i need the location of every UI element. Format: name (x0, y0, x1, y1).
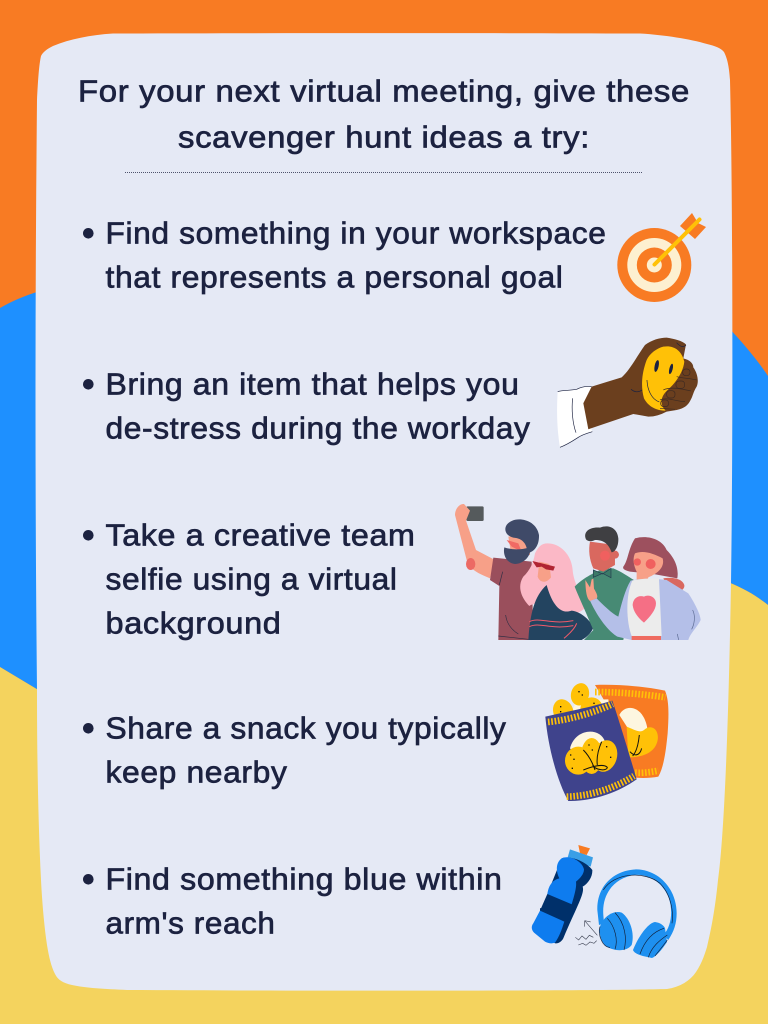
list item: something blue: Find something blue within (106, 862, 502, 896)
list item: de-stress: Bring an item that helps you (106, 366, 520, 402)
list item: team selfie: Take a creative team (106, 518, 416, 552)
list item: team selfie: selfie using a virtual (106, 562, 398, 596)
list item: team selfie (83, 518, 416, 640)
list item: de-stress (83, 366, 530, 446)
list item: personal goal (83, 216, 606, 294)
icon: group taking a selfie (455, 504, 701, 640)
list item: personal goal: Find something in your workspace (106, 216, 606, 250)
list item: de-stress: de-stress during the workday (106, 410, 530, 446)
icon: hand squeezing smiley stress ball (557, 338, 698, 447)
list item: something blue (83, 862, 502, 940)
title: scavenger hunt ideas a try: (178, 120, 590, 154)
list item: personal goal: that represents a personal goal (106, 260, 564, 294)
icon: snack bags (545, 681, 668, 801)
list item: team selfie: background (106, 606, 282, 640)
icon: arrow and squiggles (575, 921, 597, 945)
icon: blue water bottle (532, 845, 593, 943)
list item: snack: keep nearby (106, 754, 288, 790)
title (78, 74, 690, 154)
list item: snack (83, 710, 506, 790)
list item: snack: Share a snack you typically (106, 710, 506, 746)
icon: blue headphones (597, 869, 677, 958)
list item: something blue: arm's reach (106, 906, 276, 940)
title: For your next virtual meeting, give these (78, 74, 690, 108)
icon: target with arrow (617, 213, 706, 302)
